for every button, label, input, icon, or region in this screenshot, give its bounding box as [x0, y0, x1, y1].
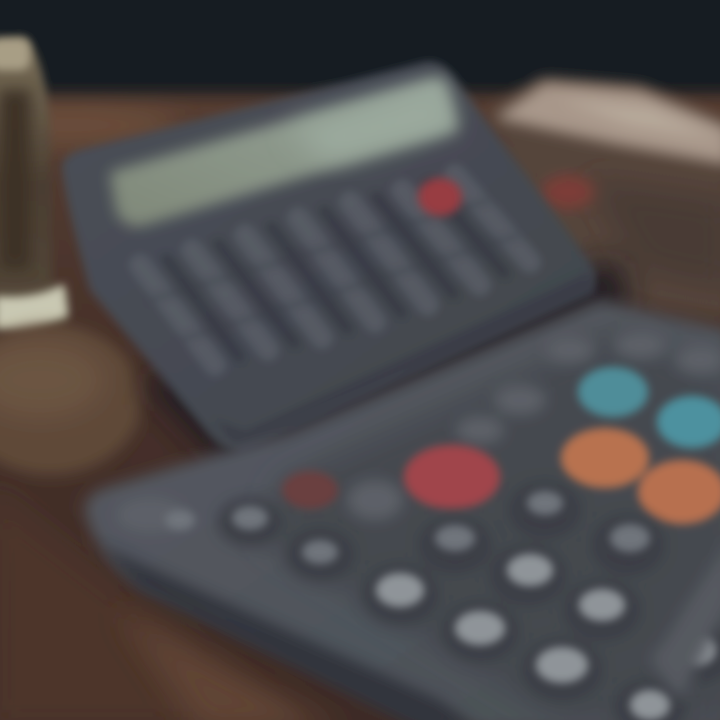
teal keys — [578, 367, 720, 448]
dark background wall — [0, 0, 720, 94]
calculator lower edge — [215, 272, 596, 452]
round brown object, left — [0, 325, 142, 475]
key row dividers — [150, 200, 520, 340]
red keys — [282, 445, 500, 509]
orange keys — [561, 428, 720, 524]
calculator body — [85, 300, 720, 720]
beige box, right background — [490, 78, 720, 320]
display highlight — [290, 92, 452, 160]
calculator shadow — [140, 260, 630, 480]
key rows — [140, 175, 530, 365]
dark key bases — [218, 482, 720, 720]
front calculator — [85, 300, 720, 720]
display — [110, 77, 458, 226]
upper keys — [116, 331, 720, 533]
dark keypad recess — [260, 330, 720, 720]
key gaps — [166, 182, 505, 358]
dim key tops — [165, 491, 650, 564]
calculator body — [62, 62, 595, 449]
red key — [418, 178, 462, 216]
light key tops — [376, 554, 716, 720]
rear calculator — [62, 62, 596, 452]
calculator front edge — [100, 545, 480, 720]
glass, left — [0, 38, 68, 332]
lighter wedge, bottom right — [650, 540, 720, 700]
